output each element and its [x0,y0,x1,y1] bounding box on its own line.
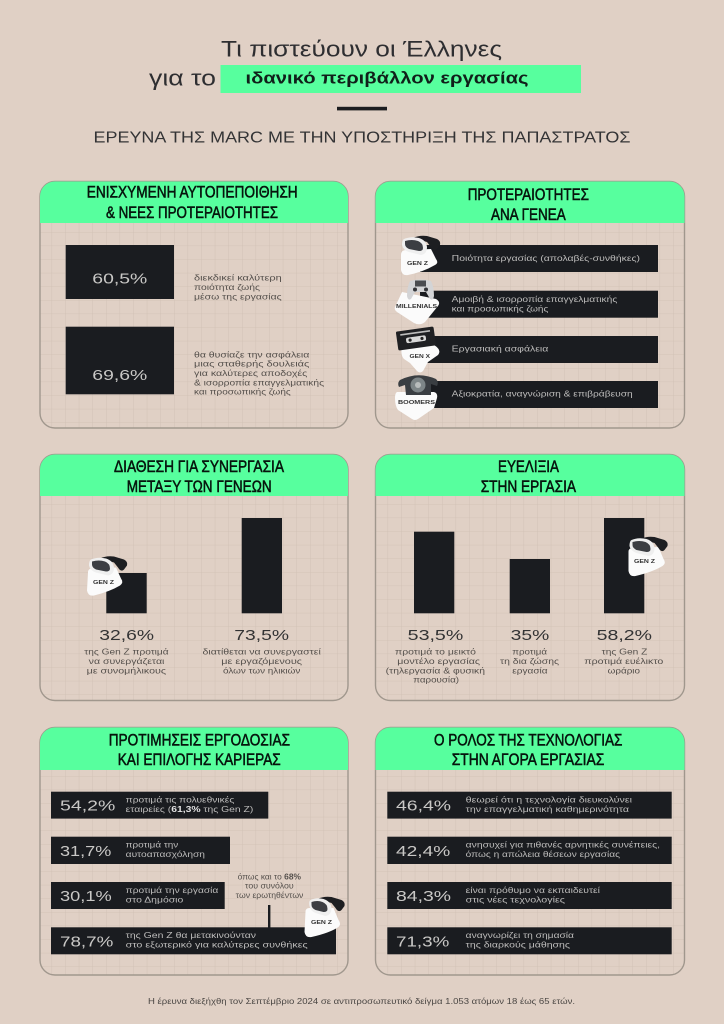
bar 73,5% [202,518,321,675]
bar 58,2%: προτιμά ευέλικτο [584,657,664,666]
row 54,2%: 54,2% [60,799,115,815]
stat 69,6%: θα θυσίαζε την ασφάλεια [194,350,310,359]
panel header: Ο ΡΟΛΟΣ ΤΗΣ ΤΕΧΝΟΛΟΓΙΑΣ [434,730,622,749]
panel header: ΕΝΙΣΧΥΜΕΝΗ ΑΥΤΟΠΕΠΟΙΘΗΣΗ [87,182,298,202]
panel header: ΜΕΤΑΞΥ ΤΩΝ ΓΕΝΕΩΝ [127,477,272,496]
title [149,36,581,93]
row: Gen X job security: Εργασιακή ασφάλεια [452,344,549,353]
panel header: ΕΥΕΛΙΞΙΑ [498,457,560,476]
panel: confidence and new priorities [40,182,348,428]
row: Millenials pay and balance: και προσωπικής ζωής [452,304,548,313]
panel header [40,182,348,223]
footer note: Η έρευνα διεξήχθη τον Σεπτέμβριο 2024 σε αντιπροσωπευτικό δείγμα 1.053 ατόμων 18 έως 65 ετών. [148,997,575,1006]
icon: Gen Z headset badge [628,537,668,576]
row 54,2%: εταιρείες ( 61,3% της Gen Z) [126,805,254,814]
icon: Millenials game controller badge [395,280,439,324]
bar 35%: προτιμά [512,648,547,657]
panel: role of technology in the job market [376,728,684,975]
bar 35%: τη δια ζώσης [500,657,559,666]
stat 69,6%: και προσωπικής ζωής [194,388,291,397]
row 42,4%: 42,4% [396,844,450,860]
row 42,4% [387,837,672,864]
bar 35%: εργασία [512,666,548,675]
bar 53,5%: (τηλεργασία & φυσική [386,666,485,675]
bar 53,5%: 53,5% [408,628,463,644]
stat 60,5% [66,245,282,301]
icon: Boomers rotary phone badge [395,375,438,420]
row 31,7%: προτιμά την [126,841,178,850]
row 42,4%: όπως η απώλεια θέσεων εργασίας [466,850,620,859]
icon: Gen Z headset badge [87,556,127,596]
row 30,1%: 30,1% [60,889,112,905]
subtitle: ΕΡΕΥΝΑ ΤΗΣ MARC ΜΕ ΤΗΝ ΥΠΟΣΤΗΡΙΞΗ ΤΗΣ ΠΑΠΑΣΤΡΑΤΟΣ [94,130,630,146]
title: Τι πιστεύουν οι Έλληνες [221,36,502,62]
row: Gen Z quality of work: Ποιότητα εργασίας (απολαβές-συνθήκες) [452,254,640,263]
row 71,3%: 71,3% [396,934,449,950]
icon: Boomers rotary phone badge: BOOMERS [398,400,436,406]
icon: Gen Z headset badge [304,897,345,937]
bar 53,5%: μοντέλο εργασίας [397,657,480,666]
bar 73,5%: όλων των ηλικιών [223,666,300,675]
callout: 68% of respondents [236,872,303,928]
row 31,7%: αυτοαπασχόληση [126,850,205,859]
icon: Gen Z headset badge: GEN Z [311,920,333,926]
row 46,4%: θεωρεί ότι η τεχνολογία διευκολύνει [466,796,632,805]
row 71,3%: αναγνωρίζει τη σημασία [466,931,574,940]
row 31,7% [51,837,230,864]
panel header: ΠΡΟΤΙΜΗΣΕΙΣ ΕΡΓΟΔΟΣΙΑΣ [109,730,290,749]
row 71,3% [387,927,672,954]
callout: 68% of respondents: του συνόλου [245,882,294,890]
row 46,4% [387,792,672,819]
row 84,3% [387,882,672,909]
panel header: ΣΤΗΝ ΕΡΓΑΣΙΑ [481,477,577,496]
row 78,7%: στο εξωτερικό για καλύτερες συνθήκες [126,940,308,949]
row 30,1%: στο Δημόσιο [126,895,184,904]
title highlighted text: ιδανικό περιβάλλον εργασίας [246,70,528,88]
icon: Gen Z headset badge: GEN Z [407,261,429,267]
panel header [376,728,684,770]
panel: willingness to work across generations [40,454,348,700]
title: για το [149,66,216,90]
bar 35% [500,559,559,675]
stat 60,5%: μέσω της εργασίας [194,292,282,301]
stat 60,5%: διεκδικεί καλύτερη [194,274,282,283]
row 84,3%: στις νέες τεχνολογίες [466,895,565,904]
bar 32,6%: της Gen Z προτιμά [84,648,169,657]
bar 53,5% [386,532,485,685]
row: Boomers meritocracy [420,381,658,408]
row: Boomers meritocracy: Αξιοκρατία, αναγνώριση & επιβράβευση [452,390,633,399]
panel header: ΑΝΑ ΓΕΝΕΑ [491,205,566,224]
row 78,7%: 78,7% [60,934,113,950]
row 42,4%: ανησυχεί για πιθανές αρνητικές συνέπειες, [466,841,660,850]
panel: flexibility at work [376,454,684,700]
bar 73,5%: με εργαζόμενους [221,657,302,666]
stat 69,6%: για καλύτερες αποδοχές [194,369,307,378]
row 30,1% [51,882,225,909]
row: Millenials pay and balance: Αμοιβή & ισορροπία επαγγελματικής [452,295,617,304]
row 46,4%: την επαγγελματική καθημερινότητα [466,805,629,814]
icon: Gen X cassette badge [396,326,439,372]
row: Millenials pay and balance [420,291,658,318]
icon: Gen Z headset badge: GEN Z [93,580,115,586]
row 84,3%: 84,3% [396,889,451,905]
panel header: ΚΑΙ ΕΠΙΛΟΓΗΣ ΚΑΡΙΕΡΑΣ [118,750,281,769]
row: Gen X job security [420,336,658,363]
row 84,3%: είναι πρόθυμο να εκπαιδευτεί [466,886,600,895]
bar 58,2%: 58,2% [597,628,652,644]
bar 35%: 35% [511,628,549,644]
row: Gen Z quality of work [420,245,658,272]
bar 32,6%: να συνεργάζεται [89,657,165,666]
callout: 68% of respondents: των ερωτηθέντων [236,891,303,900]
bar 32,6%: 32,6% [99,628,154,644]
icon: Gen X cassette badge: GEN X [410,354,431,360]
panel header: ΣΤΗΝ ΑΓΟΡΑ ΕΡΓΑΣΙΑΣ [452,750,604,769]
bar 58,2%: ωράριο [608,666,641,675]
stat 60,5%: 60,5% [92,271,147,287]
bar 53,5%: προτιμά το μεικτό [395,648,477,657]
icon: Millenials game controller badge: MILLENIALS [396,304,438,310]
bar 32,6% [84,573,169,675]
stat 69,6%: & ισορροπία επαγγελματικής [194,378,324,387]
panel header: ΔΙΑΘΕΣΗ ΓΙΑ ΣΥΝΕΡΓΑΣΙΑ [114,457,285,476]
row 78,7%: της Gen Z θα μετακινούνταν [126,931,256,940]
title highlight [220,65,581,93]
row 71,3%: της διαρκούς μάθησης [466,940,570,949]
row 54,2% [51,792,268,819]
callout: 68% of respondents: όπως και το 68% [238,872,301,881]
bar 73,5%: 73,5% [234,628,289,644]
bar 32,6%: με συνομήλικους [87,666,166,675]
bar 53,5%: παρουσία) [413,676,459,685]
row 78,7% [51,927,336,954]
panel: priorities per generation [376,182,684,428]
panel header [40,728,348,770]
stat 69,6%: 69,6% [92,368,147,384]
bar 73,5%: διατίθεται να συνεργαστεί [202,648,321,657]
bar 58,2% [584,518,664,675]
panel header [40,454,348,496]
panel header [376,454,684,496]
icon: Gen Z headset badge [401,236,440,275]
stat 69,6% [66,327,324,397]
row 46,4%: 46,4% [396,799,451,815]
panel header: & ΝΕΕΣ ΠΡΟΤΕΡΑΙΟΤΗΤΕΣ [106,203,278,222]
stat 69,6%: μιας σταθερής δουλειάς [194,360,309,369]
icon: Gen Z headset badge: GEN Z [634,559,656,565]
panel: employer and career preferences [40,728,348,975]
bar 58,2%: της Gen Z [602,648,648,657]
row 54,2%: προτιμά τις πολυεθνικές [126,796,234,805]
panel header [376,182,684,224]
row 30,1%: προτιμά την εργασία [126,886,219,895]
panel header: ΠΡΟΤΕΡΑΙΟΤΗΤΕΣ [468,185,589,204]
row 31,7%: 31,7% [60,844,111,860]
stat 60,5%: ποιότητα ζωής [194,283,260,292]
